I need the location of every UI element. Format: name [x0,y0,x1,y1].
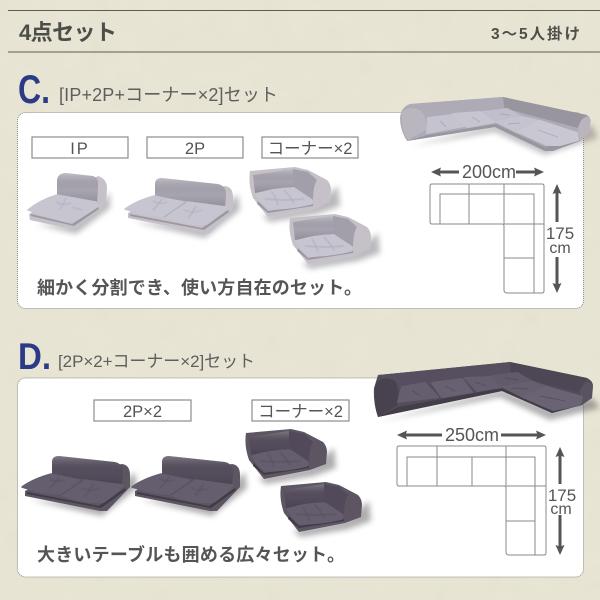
label 2P: 2P [185,140,205,158]
label 2P [147,137,243,158]
label IP [32,137,128,158]
subtitle C: [IP+2P+コーナー×2]セット [59,85,278,105]
sofa 1P [28,173,110,234]
depth dimension 175cm [546,184,574,293]
panel C background [18,112,584,308]
header band [8,10,600,52]
sofa 2P [125,178,240,238]
caption C: 細かく分割でき、使い方自在のセット。 [37,277,362,298]
panel: set D [18,362,600,577]
subtitle D: [2P×2+コーナー×2]セット [58,352,255,371]
width dimension 250cm [397,425,546,445]
caption D: 大きいテーブルも囲める広々セット。 [37,544,345,565]
L-shaped sofa photo C [400,97,598,155]
width dimension 200cm [431,162,544,182]
corner sofa 2 [289,214,380,269]
sofa 2P first [22,456,137,516]
depth dimension 175cm [548,447,576,555]
label 2P x2: 2P×2 [123,403,162,421]
depth dimension 175cm: cm [549,240,571,257]
letter D: D. [18,336,51,377]
label corner x2: コーナー×2 [258,403,343,421]
depth dimension 175cm: cm [550,501,572,518]
label corner x2: コーナー×2 [268,140,352,158]
depth dimension 175cm: 175 [546,224,574,243]
floor plan C [430,184,544,293]
corner sofa 2 [280,482,371,537]
L-shaped sofa photo D [374,362,600,421]
corner sofa 1 [249,167,340,222]
label IP: IP [70,140,90,158]
corner sofa 1 [245,429,336,484]
label 2P x2 [94,400,191,421]
letter C: C. [18,68,50,112]
heading: 4点セット: 4点セット [19,20,117,45]
section heading D [18,336,255,377]
section heading C [18,68,278,112]
width dimension 250cm: 250cm [445,425,499,445]
width dimension 200cm: 200cm [462,162,516,182]
depth dimension 175cm: 175 [548,486,576,505]
floor plan D [397,446,546,555]
panel: set C [18,97,598,308]
seating capacity: 3〜5人掛け [491,24,580,43]
panel D background [18,378,584,577]
sofa 2P second [132,456,247,516]
